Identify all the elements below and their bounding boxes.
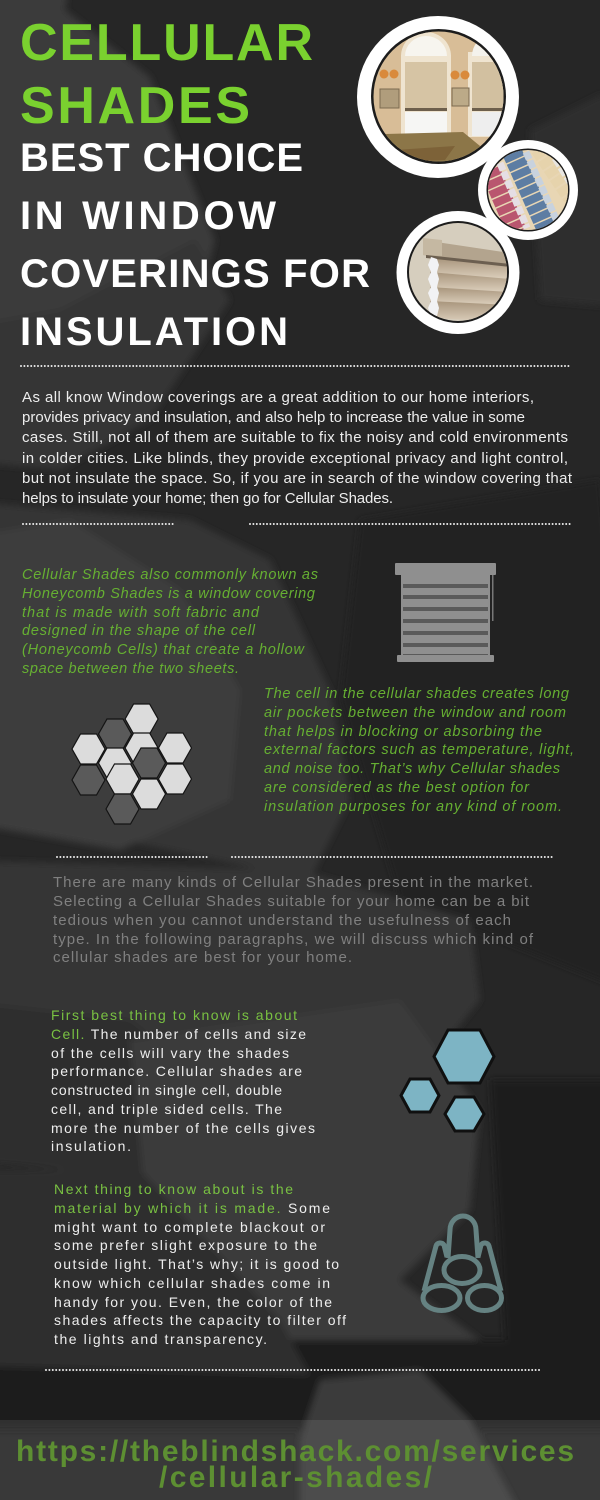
text: cell count and size: insulation. <box>51 1138 131 1154</box>
text: cell count and size: of the cells will vary the shades <box>51 1045 289 1061</box>
text: how the cell insulates: air pockets between the window and room <box>264 705 566 721</box>
text: cell count and size: First best thing to know is about <box>51 1007 297 1023</box>
text: material of the shade: Next thing to know about is the <box>54 1181 293 1197</box>
divider <box>23 523 570 525</box>
text: kinds of cellular shades: cellular shades are best for your home. <box>53 949 352 966</box>
icon: cell tubes <box>423 1216 502 1310</box>
text: what cellular shades are: that is made with soft fabric and <box>22 605 260 621</box>
text: cell count and size: constructed in single cell, double <box>51 1082 282 1098</box>
footer band <box>0 1420 600 1500</box>
icon: window blind <box>395 563 496 662</box>
text: cell count and size: Cell. The number of cells and size <box>51 1026 306 1042</box>
text: kinds of cellular shades: type. In the following paragraphs, we will discuss which kind of <box>53 931 534 948</box>
text: material of the shade: shades affects the capacity to filter off <box>54 1312 346 1328</box>
text: kinds of cellular shades: There are many kinds of Cellular Shades present in the market. <box>53 874 533 891</box>
text: material of the shade: handy for you. Even, the color of the <box>54 1294 332 1310</box>
photo: colored honeycomb fabric fan <box>478 140 578 240</box>
text: how the cell insulates <box>264 686 574 815</box>
text: material of the shade: might want to complete blackout or <box>54 1219 325 1235</box>
text: kinds of cellular shades <box>53 874 534 966</box>
text: what cellular shades are <box>22 567 318 677</box>
subtitle: best choice in window coverings: COVERINGS FOR <box>20 252 370 296</box>
photo: bedroom with cellular shades <box>357 16 519 178</box>
text: material of the shade <box>54 1181 346 1347</box>
intro paragraph: As all know Window coverings are a great addition to our home interiors, <box>22 389 534 406</box>
footer link: /cellular-shades/ <box>159 1461 433 1494</box>
subtitle: best choice in window coverings: INSULATION <box>20 310 288 354</box>
footer link <box>16 1435 574 1494</box>
text: how the cell insulates: and noise too. That’s why Cellular shades <box>264 761 560 777</box>
text: cell count and size <box>51 1007 315 1154</box>
text: what cellular shades are: (Honeycomb Cells) that create a hollow <box>22 642 306 658</box>
text: kinds of cellular shades: Selecting a Cellular Shades suitable for your home can be a bit <box>53 893 530 910</box>
text: what cellular shades are: Honeycomb Shades is a window covering <box>22 586 315 602</box>
title: cellular shades <box>20 14 313 135</box>
text: material of the shade: outside light. That’s why; it is good to <box>54 1256 339 1272</box>
title: cellular shades: CELLULAR <box>20 14 313 72</box>
divider <box>57 856 552 858</box>
subtitle: best choice in window coverings <box>20 136 370 354</box>
photo: beige cellular shade close-up <box>396 211 520 334</box>
subtitle: best choice in window coverings: IN WINDOW <box>20 194 276 238</box>
intro paragraph <box>22 389 573 507</box>
intro paragraph: provides privacy and insulation, and also help to increase the value in some <box>22 409 525 426</box>
text: material of the shade: some prefer slight exposure to the <box>54 1237 317 1253</box>
title: cellular shades: SHADES <box>20 77 250 135</box>
footer link: https://theblindshack.com/services <box>16 1435 574 1468</box>
intro paragraph: helps to insulate your home; then go for Cellular Shades. <box>22 490 393 507</box>
divider <box>21 365 569 367</box>
text: what cellular shades are: space between the two sheets. <box>22 661 239 677</box>
text: material of the shade: the lights and transparency. <box>54 1331 267 1347</box>
text: kinds of cellular shades: tedious when you cannot understand the usefulness of each <box>53 912 511 929</box>
text: cell count and size: cell, and triple sided cells. The <box>51 1101 282 1117</box>
text: what cellular shades are: Cellular Shades also commonly known as <box>22 567 318 583</box>
text: cell count and size: performance. Cellular shades are <box>51 1063 302 1079</box>
text: how the cell insulates: that helps in blocking or absorbing the <box>264 724 542 740</box>
icon: honeycomb cells <box>72 704 192 824</box>
divider <box>46 1369 541 1371</box>
text: material of the shade: know which cellular shades come in <box>54 1275 330 1291</box>
intro paragraph: in colder cities. Like blinds, they provide exceptional privacy and light control, <box>22 450 568 467</box>
text: material of the shade: material by which it is made. Some <box>54 1200 330 1216</box>
icon: three blue hexagons <box>401 1030 494 1131</box>
text: cell count and size: more the number of the cells gives <box>51 1120 315 1136</box>
subtitle: best choice in window coverings: BEST CHOICE <box>20 136 303 180</box>
text: what cellular shades are: designed in the shape of the cell <box>22 623 256 639</box>
intro paragraph: cases. Still, not all of them are suitable to fix the noisy and cold environments <box>22 429 568 446</box>
text: how the cell insulates: insulation purposes for any kind of room. <box>264 799 562 815</box>
text: how the cell insulates: are considered as the best option for <box>264 780 530 796</box>
text: how the cell insulates: external factors such as temperature, light, <box>264 742 574 758</box>
intro paragraph: but not insulate the space. So, if you are in search of the window covering that <box>22 470 573 487</box>
text: how the cell insulates: The cell in the cellular shades creates long <box>264 686 569 702</box>
